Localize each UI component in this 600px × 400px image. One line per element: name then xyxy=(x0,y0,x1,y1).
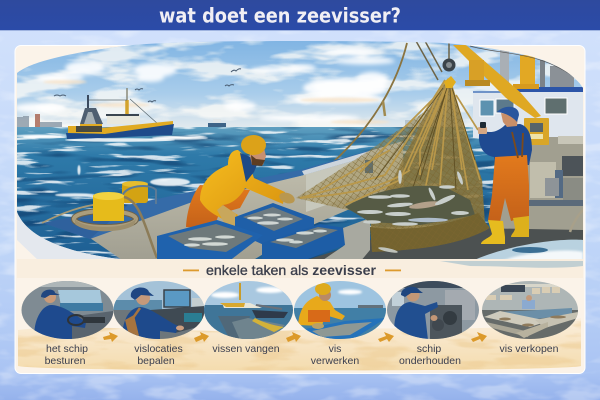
label: vissen vangen xyxy=(212,343,280,355)
dark water streaks xyxy=(17,127,494,259)
scene: fish market xyxy=(480,280,580,340)
label: onderhouden xyxy=(399,355,461,367)
arrow 3 xyxy=(286,332,301,342)
machinery xyxy=(500,118,583,230)
deck xyxy=(310,228,583,259)
rope from the mast xyxy=(333,42,408,161)
scene: trawler and net xyxy=(203,280,295,340)
task 6: vis verkopen xyxy=(480,280,580,355)
sea xyxy=(17,127,494,259)
label: bepalen xyxy=(137,355,175,367)
scene: sorting fish xyxy=(293,280,388,340)
task 3: vissen vangen xyxy=(203,280,295,355)
scene: at the console xyxy=(112,280,207,340)
fish crates xyxy=(157,203,370,262)
label: vis verkopen xyxy=(500,343,559,355)
title banner: wat doet een zeevisser? xyxy=(159,4,401,28)
hero illustration: fishermen hauling a net xyxy=(14,40,585,267)
sandy band behind task labels xyxy=(15,318,585,375)
arrow 1 xyxy=(103,332,118,342)
label: vislocaties xyxy=(134,343,183,355)
label: besturen xyxy=(45,355,86,367)
label: vis xyxy=(329,343,341,355)
arrow 2 xyxy=(194,332,209,342)
task 4: vis verwerken xyxy=(293,280,388,367)
fisherman in yellow jacket xyxy=(186,135,296,228)
arrow 4 xyxy=(378,332,394,342)
scene: at the wheel xyxy=(20,280,115,340)
yellow bollards with rope xyxy=(42,181,157,258)
mooring rope at the right edge xyxy=(568,230,572,232)
clouds xyxy=(14,48,395,121)
faded corner wash below hero xyxy=(17,212,150,268)
foreground boat hull xyxy=(90,146,404,262)
ship cabin and crane xyxy=(453,45,583,138)
arrow 5 xyxy=(471,332,487,342)
seagulls xyxy=(54,69,241,102)
main panel xyxy=(15,46,585,374)
cloud texture xyxy=(15,40,585,130)
fisherman in orange overalls xyxy=(478,107,532,244)
distant city xyxy=(17,114,430,128)
label: het schip xyxy=(46,343,88,355)
water ripple at strip right xyxy=(440,261,583,268)
task 2: vislocaties bepalen xyxy=(112,280,207,367)
foam texture xyxy=(17,127,494,259)
label: verwerken xyxy=(311,355,359,367)
sand wash strip xyxy=(17,259,583,278)
title banner xyxy=(0,0,600,31)
scene: engine maintenance xyxy=(385,280,481,340)
trawler in the distance xyxy=(23,88,175,142)
label: schip xyxy=(417,343,441,355)
distant small ship xyxy=(208,119,226,127)
whitecaps xyxy=(14,134,208,197)
task 5: schip onderhouden xyxy=(385,280,481,367)
fishing net full of fish xyxy=(296,41,490,254)
task 1: het schip besturen xyxy=(20,280,115,367)
subtitle: enkele taken als zeevisser: enkele taken als zeevisser xyxy=(206,262,377,278)
